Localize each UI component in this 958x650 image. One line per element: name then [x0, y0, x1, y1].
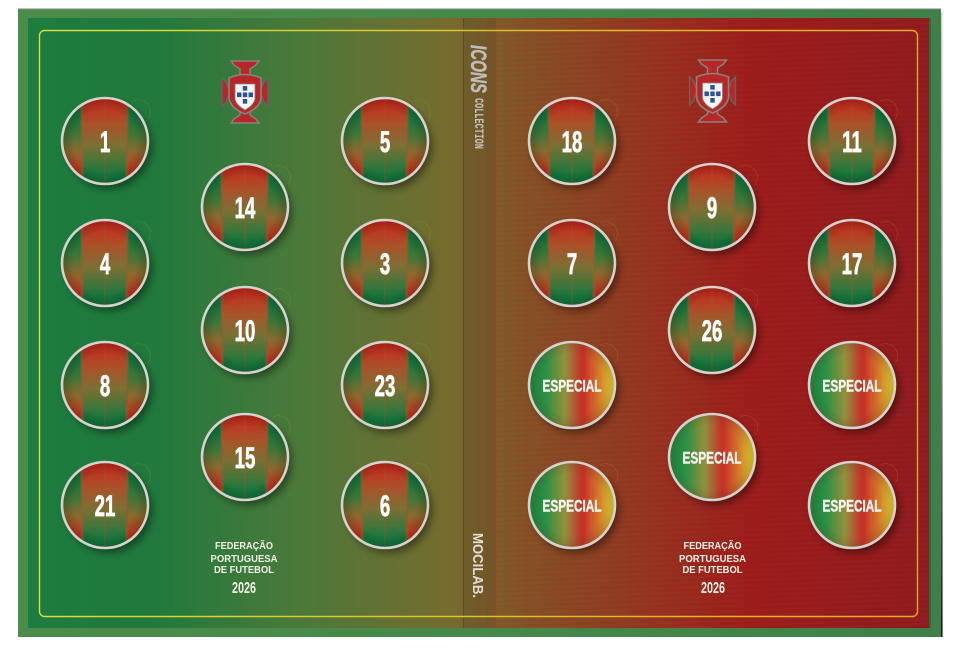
- coin 1: [55, 97, 155, 189]
- text block: federation right: FEDERAÇÃO: [684, 539, 742, 552]
- coin 5: 5: [380, 126, 390, 159]
- coin 3: 3: [380, 248, 390, 281]
- coin 18: [522, 97, 622, 189]
- spine logo: COLLECTION: COLLECTION: [471, 98, 486, 149]
- coin 5: [335, 97, 435, 189]
- text block: federation right: PORTUGUESA: [679, 554, 746, 565]
- coin 4: 4: [100, 248, 110, 281]
- coin especial D: [808, 341, 899, 433]
- coin 7: [522, 219, 622, 311]
- coin 10: [195, 286, 295, 378]
- coin 11: [802, 97, 902, 189]
- text block: federation left: 2026: [232, 580, 256, 597]
- coin 14: 14: [235, 192, 255, 225]
- text block: federation right: DE FUTEBOL: [682, 565, 742, 576]
- coin 14: [195, 163, 295, 255]
- coin 21: 21: [95, 490, 115, 523]
- coin 1: 1: [100, 126, 110, 159]
- coin 11: 11: [842, 126, 862, 159]
- coin 21: [55, 461, 155, 553]
- coin 17: [802, 219, 902, 311]
- coin 18: 18: [562, 126, 582, 159]
- coin 8: [55, 341, 155, 433]
- coin 3: [335, 219, 435, 311]
- coin especial B: [528, 461, 619, 553]
- coin especial A: ESPECIAL: [542, 376, 602, 396]
- coin 26: [662, 286, 762, 378]
- text block: federation left: FEDERAÇÃO: [215, 539, 273, 552]
- coin 8: 8: [100, 370, 110, 403]
- coin especial B: ESPECIAL: [542, 496, 602, 516]
- coin 9: 9: [707, 192, 717, 225]
- coin 6: [335, 461, 435, 553]
- spine logo: ICONS: ICONS: [466, 45, 491, 93]
- coin especial A: [528, 341, 619, 433]
- coin 6: 6: [380, 490, 390, 523]
- coin 23: 23: [375, 370, 395, 403]
- coin especial D: ESPECIAL: [822, 376, 882, 396]
- coin 15: [195, 413, 295, 505]
- coin especial E: ESPECIAL: [822, 496, 882, 516]
- text block: federation left: DE FUTEBOL: [214, 565, 274, 576]
- coin 17: 17: [842, 248, 862, 281]
- coin especial C: [668, 413, 759, 505]
- coin 10: 10: [235, 315, 255, 348]
- coin 15: 15: [235, 442, 255, 475]
- coin especial C: ESPECIAL: [682, 448, 742, 468]
- panel: spine: [463, 18, 496, 628]
- coin 26: 26: [702, 315, 722, 348]
- text block: federation right: [679, 539, 746, 597]
- icon: crest right: [690, 60, 736, 122]
- text block: federation left: [210, 539, 278, 597]
- coin especial E: [808, 461, 899, 553]
- coin 4: [55, 219, 155, 311]
- spine brand: MOCILAB: MOCILAB.: [469, 533, 486, 598]
- icon: crest left: [222, 61, 268, 123]
- text block: federation left: PORTUGUESA: [210, 554, 278, 565]
- coin 9: [662, 163, 762, 255]
- coin 7: 7: [567, 248, 577, 281]
- coin 23: [335, 341, 435, 433]
- text block: federation right: 2026: [701, 580, 725, 597]
